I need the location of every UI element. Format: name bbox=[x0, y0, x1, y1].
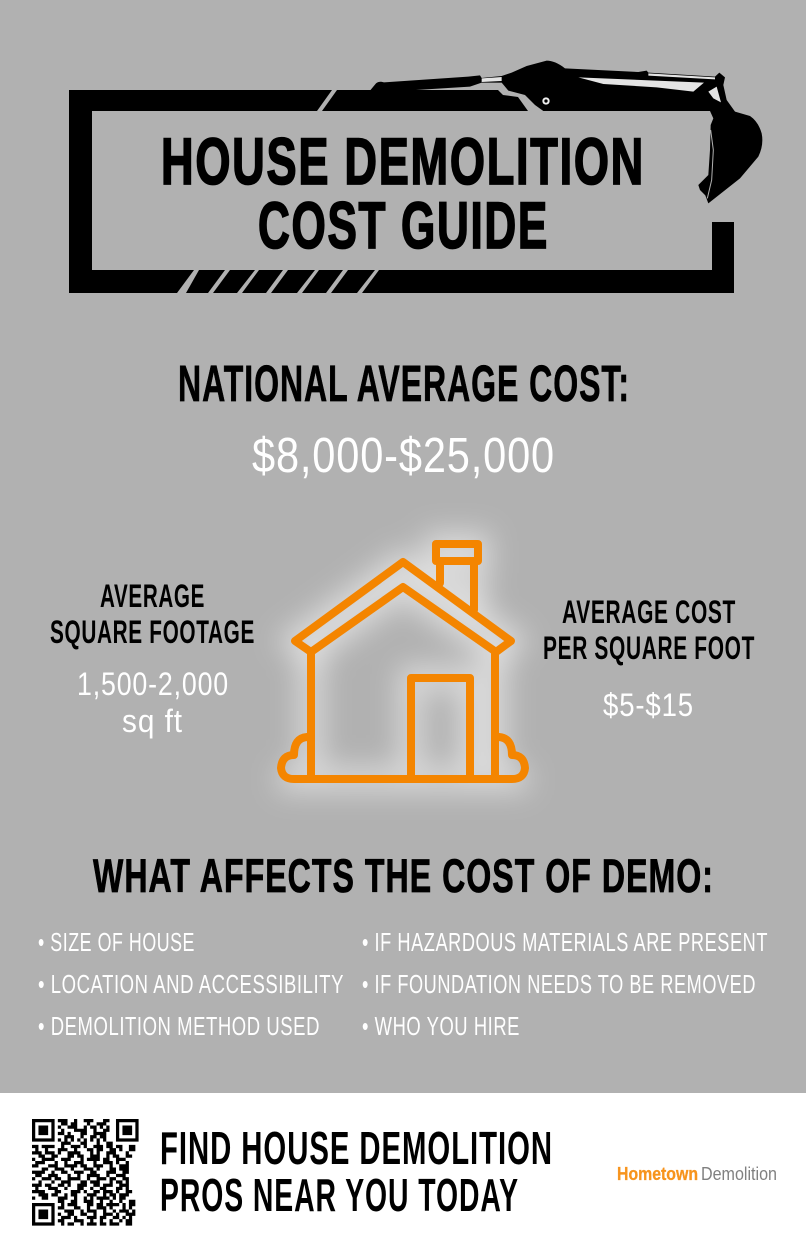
list: left column of cost factors: • DEMOLITION METHOD USED bbox=[38, 1011, 320, 1041]
heading: average square footage bbox=[50, 578, 255, 650]
call to action: PROS NEAR YOU TODAY bbox=[160, 1169, 519, 1221]
cost per square foot value: $5-$15 bbox=[603, 687, 694, 723]
frame: hazard stripes cut into the bottom bar bbox=[177, 270, 379, 293]
call to action bbox=[160, 1122, 553, 1221]
title: COST GUIDE bbox=[258, 188, 549, 262]
block: average cost per square foot bbox=[543, 594, 755, 723]
national cost value: $8,000-$25,000 bbox=[252, 429, 555, 483]
house outline bbox=[281, 544, 525, 779]
title frame with excavator bbox=[69, 61, 762, 293]
list: right column of cost factors bbox=[362, 927, 768, 1041]
call to action: FIND HOUSE DEMOLITION bbox=[160, 1122, 553, 1174]
heading: average cost per square foot bbox=[543, 594, 755, 666]
house glow bbox=[278, 544, 528, 779]
square footage value: 1,500-2,000 bbox=[77, 666, 229, 702]
heading: average square footage: AVERAGE bbox=[100, 578, 205, 614]
frame: top bar segment under the arm bbox=[322, 90, 528, 111]
icon: orange house with glow bbox=[278, 544, 528, 779]
icon: QR code bbox=[32, 1119, 139, 1226]
footer panel bbox=[0, 1093, 806, 1252]
logo: Hometown Demolition: Hometown bbox=[617, 1164, 698, 1184]
square footage value: sq ft bbox=[122, 703, 183, 739]
list: right column of cost factors: • WHO YOU HIRE bbox=[362, 1011, 520, 1041]
frame: left, top and bottom bars bbox=[69, 90, 734, 293]
list: left column of cost factors bbox=[38, 927, 344, 1041]
list: left column of cost factors: • SIZE OF HOUSE bbox=[38, 927, 195, 957]
heading: average square footage: SQUARE FOOTAGE bbox=[50, 614, 255, 650]
list: left column of cost factors: • LOCATION AND ACCESSIBILITY bbox=[38, 969, 344, 999]
logo: Hometown Demolition: Demolition bbox=[701, 1164, 777, 1184]
square footage value bbox=[77, 666, 229, 739]
icon: excavator arm and bucket bbox=[370, 61, 762, 203]
logo: Hometown Demolition bbox=[617, 1164, 777, 1184]
footer background bbox=[0, 1093, 806, 1252]
block: average square footage bbox=[50, 578, 255, 739]
title bbox=[161, 124, 645, 262]
